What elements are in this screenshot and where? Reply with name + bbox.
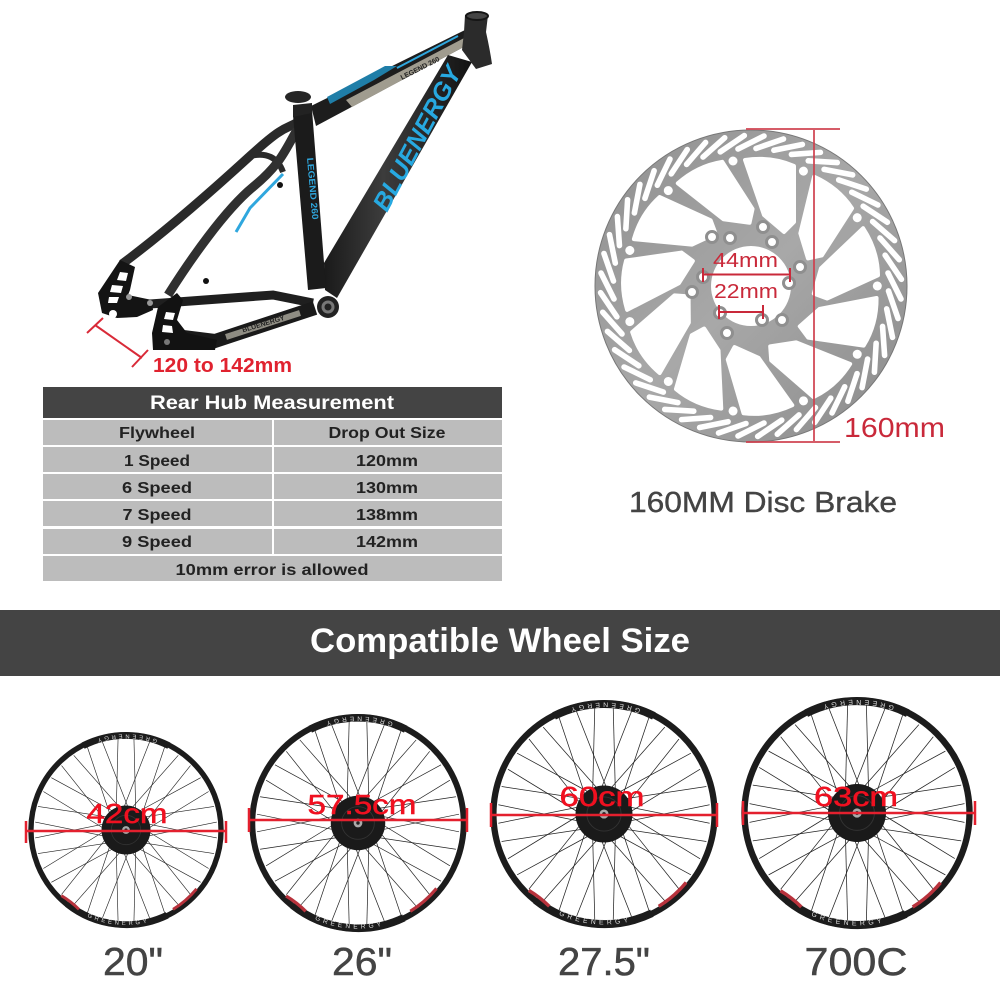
diameter label: 60cm [560, 781, 644, 812]
section banner [0, 610, 1000, 676]
column heads row: Drop Out Size [328, 425, 446, 442]
wheel graphic: GREENERGY [328, 716, 392, 726]
row 9 speed: 142mm [356, 534, 418, 551]
column heads row: Flywheel [119, 425, 195, 442]
seat stay bridge [250, 155, 283, 172]
44mm dimension [703, 250, 790, 282]
far chain stay [150, 295, 313, 304]
head tube [462, 12, 492, 69]
wheel graphic: GREENERGY [824, 700, 894, 710]
bottom bracket [317, 296, 339, 318]
160mm dimension: 160mm [844, 412, 945, 443]
wheel 26 inch [248, 714, 468, 984]
top tube: LEGEND 260 [400, 56, 441, 82]
diameter line [249, 808, 467, 832]
table header: Rear Hub Measurement [150, 393, 395, 414]
down tube [324, 55, 472, 298]
size label: 20" [103, 941, 163, 984]
wheel graphic: GREENERGY [812, 912, 881, 926]
brand lettering on down tube: BLUENERGY [368, 59, 469, 216]
diameter line [26, 821, 226, 843]
row 9 speed [43, 529, 502, 554]
wheel graphic [250, 714, 466, 932]
seat tube [293, 110, 326, 290]
wheel graphic [490, 700, 718, 928]
wheel 27.5 inch [490, 700, 718, 984]
table footer note [43, 556, 502, 581]
size label: 700C [804, 941, 908, 984]
diameter label: 42cm [86, 798, 168, 829]
44mm dimension: 44mm [713, 250, 778, 272]
bolt holes [686, 222, 806, 338]
22mm dimension: 22mm [714, 281, 778, 303]
wheel graphic [28, 732, 224, 928]
row 1 speed: 1 Speed [124, 453, 190, 470]
wheel graphic: GREENERGY [88, 914, 146, 925]
diameter line [491, 803, 717, 827]
disc brake rotor [586, 121, 945, 451]
diameter label: 63cm [814, 781, 898, 812]
seat clamp [285, 91, 312, 117]
dimension label: 120 to 142mm [153, 355, 292, 377]
row 6 speed [43, 474, 502, 499]
lettering on seat tube: LEGEND 260 [305, 157, 320, 220]
near dropout [152, 293, 217, 350]
row 1 speed [43, 447, 502, 472]
row 7 speed: 138mm [356, 507, 418, 524]
far seat stay [122, 122, 298, 264]
wheel 20 inch [24, 732, 228, 984]
far dropout [98, 260, 153, 318]
rotor body [586, 121, 916, 451]
disc brake caption: 160MM Disc Brake [629, 487, 897, 519]
diameter label: 57.5cm [308, 789, 416, 820]
row 6 speed: 6 Speed [122, 480, 192, 497]
wheel graphic: GREENERGY [560, 911, 628, 924]
size label: 27.5" [558, 941, 650, 984]
size label: 26" [332, 941, 392, 984]
near chain stay: BLUENERGY [242, 315, 286, 334]
top tube [311, 30, 473, 126]
table footer note: 10mm error is allowed [176, 562, 368, 579]
wheel graphic [741, 697, 973, 930]
bike frame illustration [98, 12, 492, 350]
160mm dimension [746, 129, 945, 443]
column heads row [43, 420, 502, 445]
section banner: Compatible Wheel Size [310, 622, 690, 660]
table header [43, 387, 502, 418]
row 1 speed: 120mm [356, 453, 418, 470]
row 6 speed: 130mm [356, 480, 418, 497]
near chain stay [183, 308, 315, 341]
rear hub measurement table [43, 387, 502, 581]
dropout width dimension [87, 318, 292, 377]
row 7 speed: 7 Speed [122, 507, 192, 524]
dimension line [87, 318, 148, 367]
near seat stay [168, 130, 297, 295]
wheel 700C [741, 697, 976, 984]
wheel graphic: GREENERGY [98, 734, 157, 743]
row 7 speed [43, 501, 502, 526]
22mm dimension [714, 281, 778, 319]
diameter line [743, 801, 975, 825]
row 9 speed: 9 Speed [122, 534, 192, 551]
wheel graphic: GREENERGY [572, 702, 640, 713]
wheel graphic: GREENERGY [316, 916, 380, 929]
